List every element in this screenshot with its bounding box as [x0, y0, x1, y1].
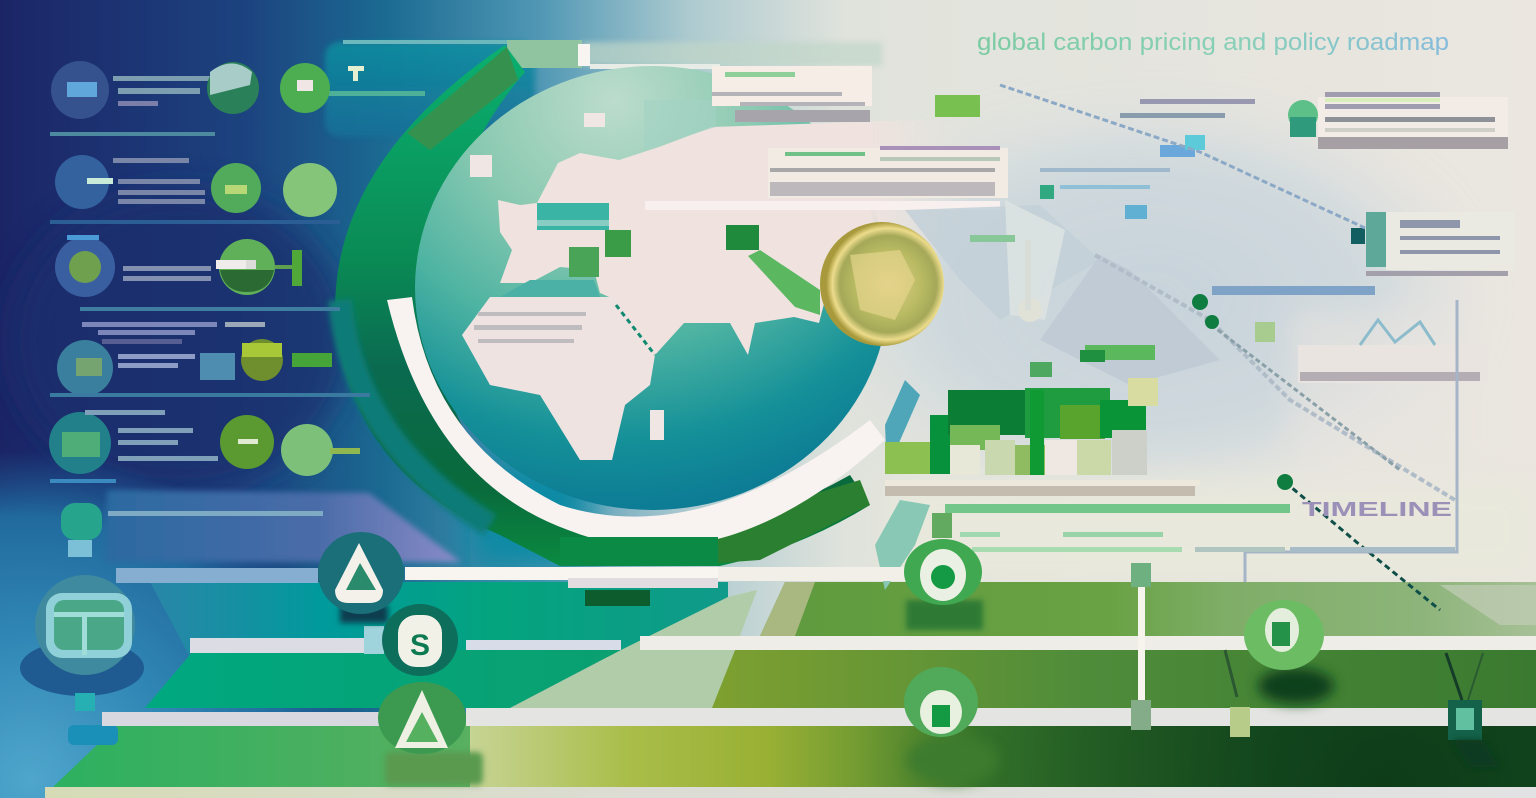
row 4	[57, 322, 332, 396]
map plates	[905, 95, 1255, 385]
row 5	[49, 410, 360, 476]
white inner ring	[387, 297, 885, 547]
timeline label: TIMELINE	[1302, 499, 1452, 521]
inland sea	[644, 100, 716, 150]
row 6	[61, 503, 323, 557]
timeline node: triangle green	[378, 682, 483, 785]
label bar	[1212, 286, 1375, 295]
ring bottom segment	[560, 537, 718, 566]
right side panels	[645, 66, 1514, 385]
horizontal timeline rails	[102, 567, 1536, 726]
lavender band	[105, 490, 461, 562]
panel 4 right	[1351, 212, 1514, 276]
upper banner behind globe	[325, 40, 882, 137]
ring segment top	[407, 47, 518, 150]
lower text block	[875, 500, 1455, 590]
red sea dashes	[616, 305, 655, 355]
green outer ring	[335, 45, 870, 566]
timeline node: dollar: S	[410, 629, 430, 662]
diagonal connector lines	[1000, 85, 1457, 610]
green location flags on globe	[569, 225, 820, 315]
panel 5	[1255, 320, 1488, 383]
small timeline markers	[1131, 563, 1500, 767]
africa continent	[462, 297, 655, 460]
islands	[470, 113, 664, 440]
large lower left icon	[20, 575, 144, 745]
connector pins	[1192, 294, 1293, 490]
bar chart	[885, 345, 1158, 475]
timeline node: lower green	[904, 667, 998, 784]
teal wedge right of globe	[885, 380, 920, 470]
chart shelf	[885, 480, 1200, 496]
timeline node: recycle triangle	[318, 532, 404, 623]
soft colour fields	[10, 90, 1536, 582]
row 1	[51, 61, 330, 119]
outer teal band	[340, 300, 490, 525]
row 2	[55, 155, 337, 217]
mediterranean sea	[537, 203, 609, 230]
globe	[335, 45, 975, 566]
middle green band	[712, 650, 1536, 708]
panel 3 top right	[1288, 92, 1508, 149]
timeline node: dollar	[382, 604, 458, 676]
panel 1	[712, 66, 872, 122]
lower left blue field	[0, 450, 360, 798]
eurasia landmass	[498, 118, 975, 355]
panel 2	[645, 146, 1008, 210]
timeline node: green recycle	[904, 513, 983, 630]
upper green band	[760, 582, 1536, 636]
timeline node: right green	[1244, 600, 1334, 704]
ocean sphere	[415, 66, 889, 510]
bottom globe stand	[585, 590, 650, 606]
ring segment lower right	[718, 480, 870, 563]
text lines on africa	[474, 312, 586, 343]
left column list	[20, 61, 370, 745]
green ground bands	[45, 582, 1536, 798]
coin	[820, 222, 944, 346]
top right title: global carbon pricing and policy roadmap	[977, 29, 1449, 56]
row 3	[55, 235, 302, 297]
